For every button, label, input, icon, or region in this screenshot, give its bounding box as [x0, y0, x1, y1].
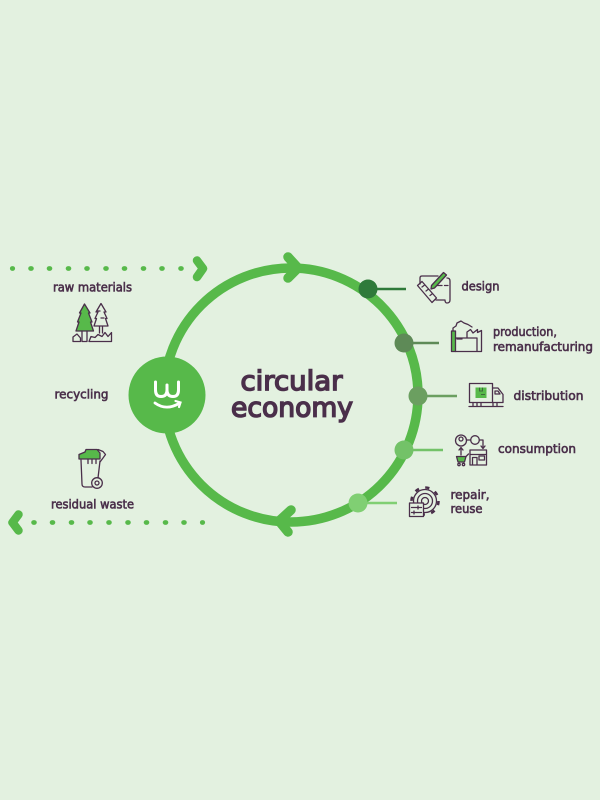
label: distribution: distribution	[514, 389, 584, 403]
node: distribution	[408, 386, 457, 406]
label: repair, reuse: reuse	[450, 502, 482, 516]
label: residual waste: residual waste	[51, 498, 134, 512]
icon: design	[418, 272, 450, 303]
node: production	[394, 334, 439, 352]
icon: consumption	[456, 435, 486, 466]
label: repair, reuse	[450, 488, 490, 516]
arrow: ring top clockwise	[288, 257, 298, 278]
title: circular economy: circular	[240, 366, 343, 397]
icon: trees	[73, 304, 112, 342]
label: production, remanufacturing	[493, 325, 593, 354]
icon: truck	[469, 384, 503, 406]
title: circular economy: economy	[231, 392, 353, 424]
label: repair, reuse: repair,	[450, 488, 490, 502]
dotted arrow: residual waste output	[12, 514, 205, 530]
label: raw materials: raw materials	[53, 280, 132, 294]
label: recycling: recycling	[54, 388, 108, 402]
icon: gear	[410, 488, 438, 516]
arrow: ring bottom counter-direction	[279, 510, 291, 532]
circular ring	[164, 257, 418, 532]
label: consumption: consumption	[498, 442, 576, 456]
label: design: design	[462, 280, 500, 294]
logo badge: recycling circle	[128, 356, 206, 434]
node: design	[358, 280, 406, 298]
label: production, remanufacturing: production,	[493, 325, 557, 339]
node: consumption	[394, 440, 443, 460]
node: repair	[348, 494, 397, 512]
icon: waste bin	[79, 450, 106, 488]
dotted arrow: raw materials input	[10, 260, 203, 277]
title: circular economy	[231, 366, 353, 424]
icon: factory	[452, 321, 482, 352]
label: production, remanufacturing: remanufacturing	[493, 340, 593, 354]
